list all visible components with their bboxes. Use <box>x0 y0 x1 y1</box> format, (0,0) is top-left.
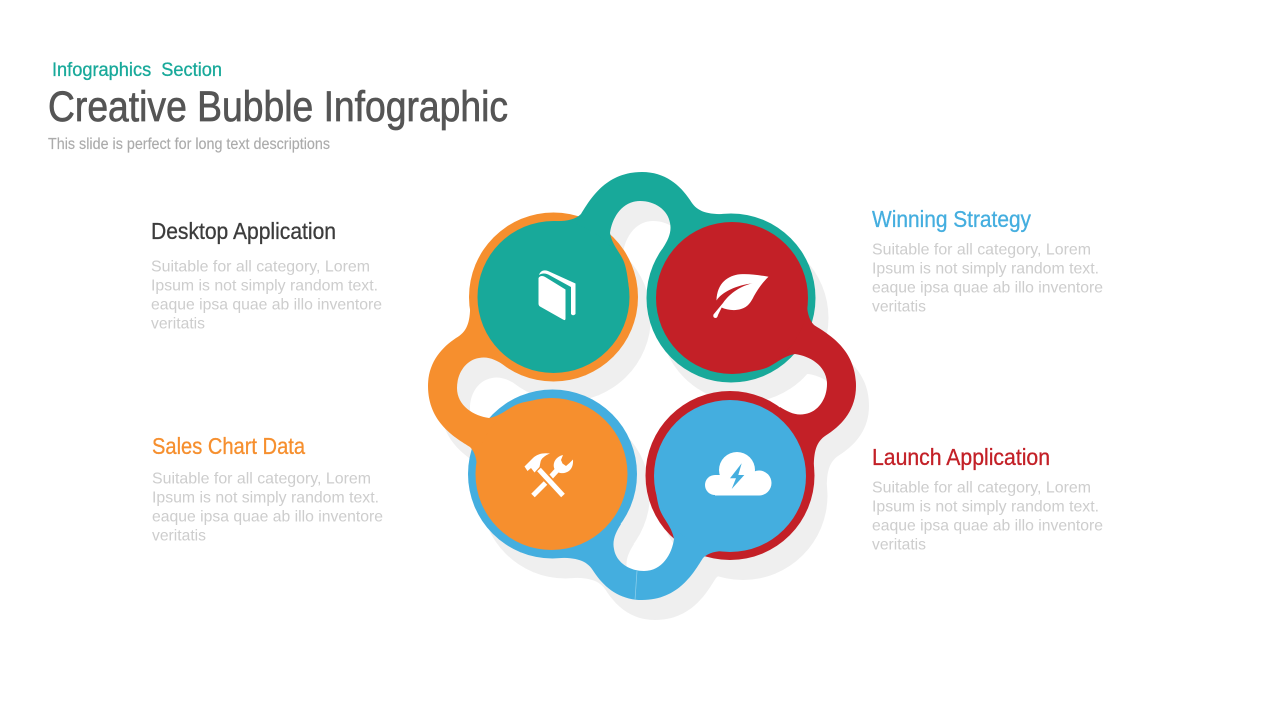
text block: eaque ipsa quae ab illo inventore <box>151 296 382 314</box>
text block: eaque ipsa quae ab illo inventore <box>872 280 1103 296</box>
bubble: orange <box>476 398 628 550</box>
text block: Ipsum is not simply random text. <box>872 498 1099 516</box>
text block: eaque ipsa quae ab illo inventore <box>872 518 1103 534</box>
panel: Sales Chart Data <box>152 433 383 544</box>
text block: Suitable for all category, Lorem <box>152 470 371 488</box>
text block: veritatis <box>872 298 926 316</box>
bubble: blue <box>654 400 806 552</box>
heading: Sales Chart Data <box>152 433 306 459</box>
text block: Ipsum is not simply random text. <box>151 278 378 294</box>
connector arms <box>428 172 856 600</box>
icon: cloud with lightning <box>705 452 772 496</box>
bubble: red <box>656 222 808 374</box>
text block: veritatis <box>872 536 926 554</box>
text block <box>151 258 382 332</box>
subtitle: This slide is perfect for long text descriptions <box>48 136 330 153</box>
title: Creative Bubble Infographic <box>48 83 508 131</box>
text block <box>872 242 1103 316</box>
text block: eaque ipsa quae ab illo inventore <box>152 508 383 526</box>
heading: Desktop Application <box>151 218 336 244</box>
icon: book <box>538 270 576 320</box>
text block: Ipsum is not simply random text. <box>152 490 379 506</box>
text block: Suitable for all category, Lorem <box>151 258 370 276</box>
text block: Suitable for all category, Lorem <box>872 480 1091 496</box>
bubble diagram <box>428 172 869 620</box>
panel: Winning Strategy <box>872 206 1103 316</box>
heading: Launch Application <box>872 444 1050 470</box>
header <box>48 59 508 153</box>
text block: veritatis <box>151 316 205 332</box>
panel: Desktop Application <box>151 218 382 332</box>
heading: Winning Strategy <box>872 206 1031 232</box>
text block: veritatis <box>152 528 206 544</box>
icon: hammer and wrench <box>524 453 573 496</box>
panel: Launch Application <box>872 444 1103 554</box>
text block: Ipsum is not simply random text. <box>872 260 1099 278</box>
icon: leaf <box>713 274 768 318</box>
text block <box>872 480 1103 554</box>
bubble: teal <box>478 221 630 373</box>
drop shadow <box>441 192 869 620</box>
section label: Infographics Section <box>52 59 222 81</box>
text block <box>152 470 383 544</box>
text block: Suitable for all category, Lorem <box>872 242 1091 258</box>
outer rings <box>468 212 816 560</box>
